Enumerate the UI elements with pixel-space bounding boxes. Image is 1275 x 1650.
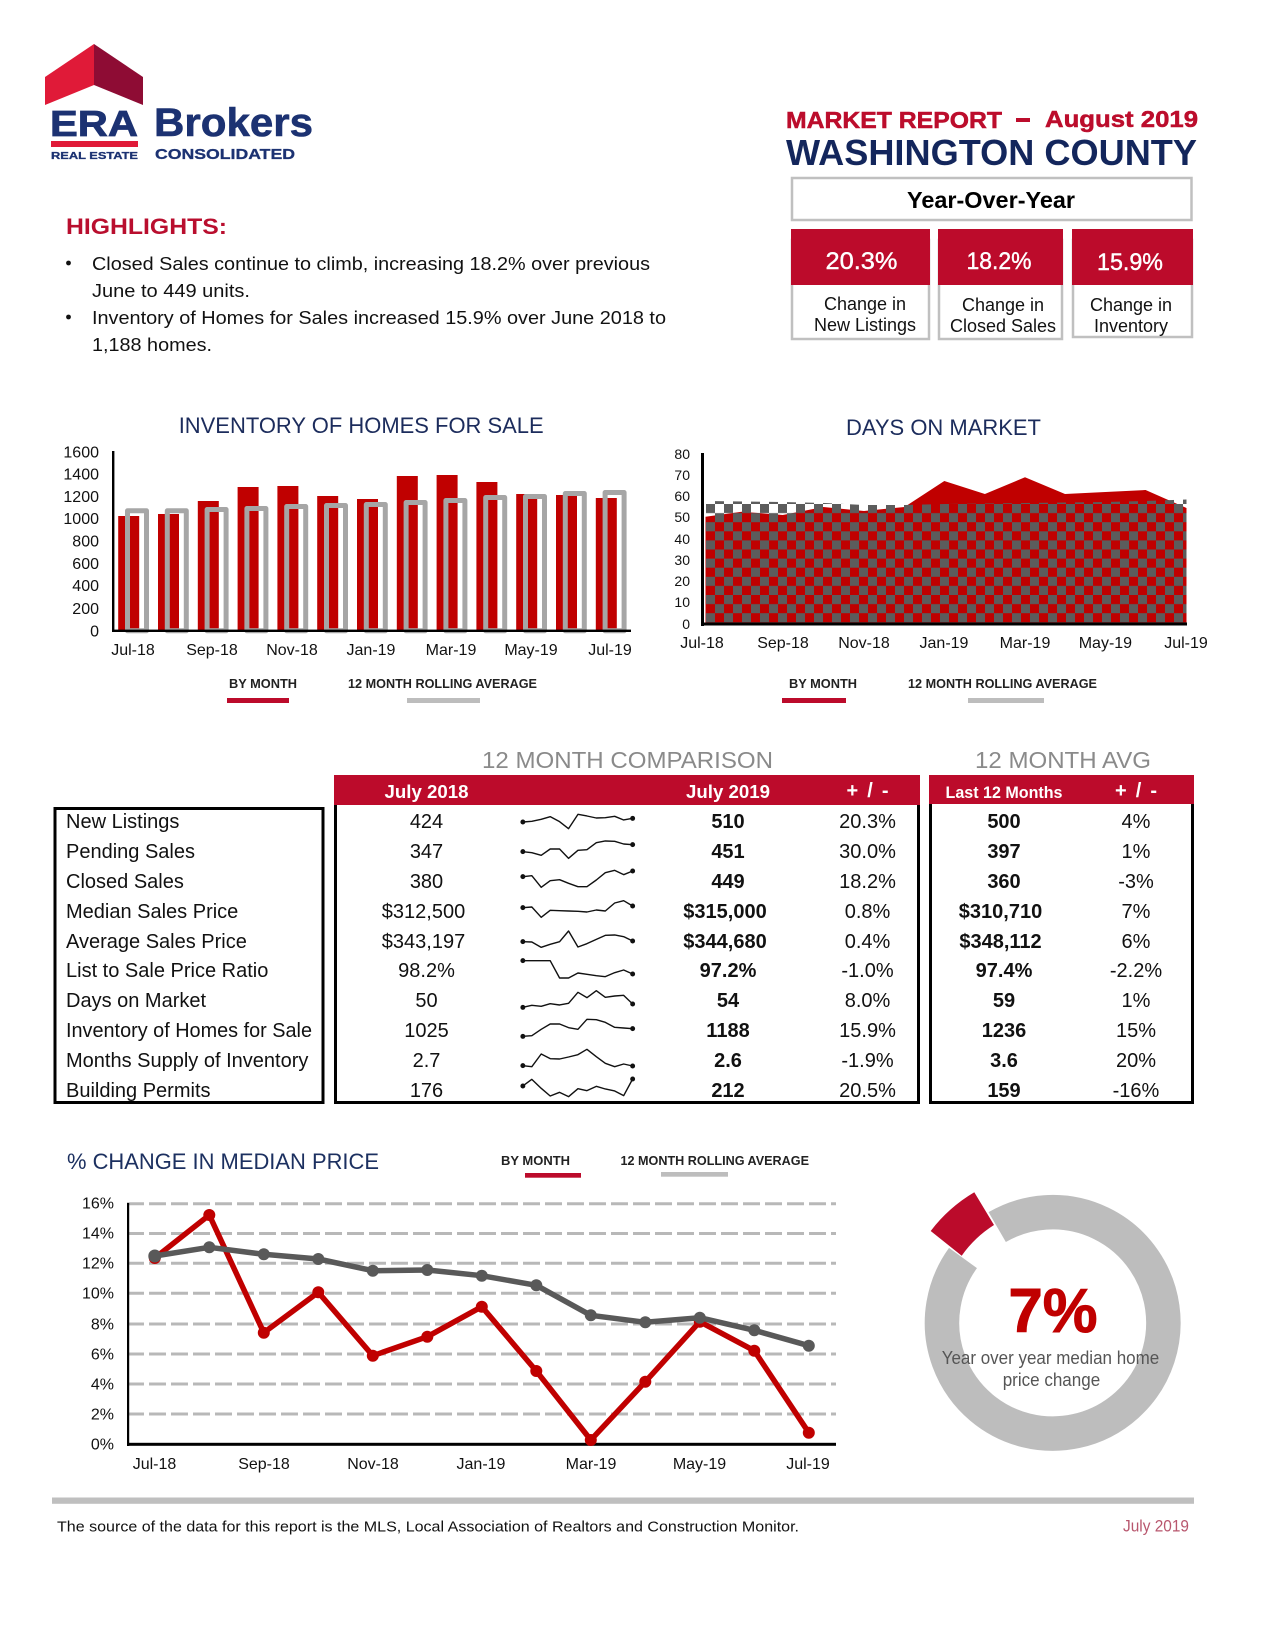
- table frame: row labels: [55, 808, 323, 1102]
- bullet text 1: June to 449 units.: [92, 280, 250, 301]
- y axis labels: [63, 444, 99, 640]
- column: average change: 7%: [1122, 901, 1151, 923]
- column: average change: [1110, 811, 1162, 1102]
- logo: consolidated: CONSOLIDATED: [155, 146, 295, 163]
- card: inventory: Change in: [1090, 295, 1172, 315]
- legend: [782, 677, 1097, 703]
- column: July 2018: 176: [410, 1080, 443, 1102]
- table header: average: Last 12 Months: [946, 784, 1062, 802]
- y axis labels: 0%: [91, 1436, 114, 1454]
- donut track: [942, 1212, 1163, 1434]
- y axis labels: 200: [72, 601, 99, 618]
- column: July 2019: 451: [711, 841, 745, 863]
- line chart: [82, 1196, 836, 1473]
- card: closed sales: [938, 229, 1063, 339]
- card: closed sales: Closed Sales: [950, 316, 1056, 336]
- chart title: INVENTORY OF HOMES FOR SALE: [179, 413, 544, 438]
- column: July 2018: 380: [410, 871, 443, 893]
- column: average change: 6%: [1122, 931, 1151, 953]
- panel: comparison tables: [55, 747, 1194, 1102]
- column: July 2018: 424: [410, 811, 443, 833]
- column: average change: -2.2%: [1110, 960, 1162, 982]
- legend: 12 MONTH ROLLING AVERAGE: [348, 677, 537, 691]
- y axis labels: [674, 446, 690, 632]
- bar chart: [63, 444, 632, 659]
- card: closed sales: 18.2%: [966, 248, 1032, 275]
- x axis labels: Jan-19: [457, 1456, 506, 1473]
- y axis labels: 4%: [91, 1376, 114, 1394]
- x axis labels: Jul-19: [588, 642, 632, 659]
- rolling average checker area: [706, 500, 1186, 624]
- bullet text 1: Closed Sales continue to climb, increasing 18.2% over previous: [92, 253, 650, 274]
- heading dash: [1016, 118, 1030, 122]
- column: change: -1.9%: [841, 1050, 894, 1072]
- column: last 12 months: 397: [987, 841, 1021, 863]
- y axis labels: 400: [72, 578, 99, 595]
- column: last 12 months: $310,710: [959, 901, 1042, 923]
- x axis labels: Mar-19: [566, 1456, 616, 1473]
- column: average change: 1%: [1122, 990, 1151, 1012]
- y axis labels: 800: [72, 534, 99, 550]
- x axis labels: Jan-19: [347, 642, 396, 659]
- panel: year-over-year: [791, 178, 1193, 339]
- x axis labels: Jul-19: [786, 1456, 830, 1473]
- column: average change: 4%: [1122, 811, 1151, 833]
- x axis labels: Mar-19: [426, 642, 476, 659]
- y axis labels: 1400: [63, 466, 99, 484]
- legend: BY MONTH: [501, 1154, 570, 1168]
- column: last 12 months: 360: [987, 871, 1021, 893]
- line: rolling average: [148, 1241, 815, 1352]
- legend: 12 MONTH ROLLING AVERAGE: [908, 677, 1097, 691]
- table header: average: + / -: [1115, 780, 1157, 802]
- x axis labels: Jul-18: [111, 642, 155, 659]
- x axis labels: Jul-18: [680, 635, 724, 652]
- column: July 2018: 347: [410, 841, 443, 863]
- highlights panel: [66, 214, 666, 355]
- column: change: 8.0%: [845, 990, 891, 1012]
- column: last 12 months: 97.4%: [976, 960, 1033, 982]
- donut gauge: year over year median price change: [931, 1192, 1163, 1434]
- column: July 2019: 97.2%: [700, 960, 757, 982]
- column: change: 18.2%: [839, 871, 896, 893]
- row labels: New Listings: [66, 811, 179, 833]
- column: average change: -16%: [1113, 1080, 1160, 1102]
- rolling average outline bars: [128, 492, 624, 631]
- y axis labels: 0: [682, 616, 690, 632]
- y axis labels: 2%: [91, 1406, 114, 1424]
- table frame: average: [930, 790, 1192, 1102]
- row labels: Months Supply of Inventory: [66, 1050, 308, 1072]
- y axis labels: 50: [674, 509, 690, 525]
- row labels: Closed Sales: [66, 871, 184, 893]
- card: inventory: Inventory: [1094, 316, 1168, 336]
- column: change: 15.9%: [839, 1020, 896, 1042]
- logo wordmark: ERA: ERA: [50, 103, 138, 144]
- gauge caption: Year over year median home: [942, 1348, 1159, 1368]
- chart title: % CHANGE IN MEDIAN PRICE: [67, 1149, 379, 1174]
- y axis labels: 6%: [91, 1346, 114, 1364]
- row labels: Median Sales Price: [66, 901, 238, 923]
- bullet text 2: Inventory of Homes for Sales increased 15.9% over June 2018 to: [92, 307, 666, 328]
- x axis labels: Nov-18: [266, 642, 318, 659]
- card: new listings: Change in: [824, 294, 906, 314]
- source note: The source of the data for this report is the MLS, Local Association of Realtors and Construction Monitor.: [57, 1518, 799, 1536]
- x axis labels: Nov-18: [347, 1456, 399, 1473]
- chart title: DAYS ON MARKET: [846, 415, 1041, 440]
- gauge caption: price change: [1003, 1370, 1100, 1390]
- x axis labels: Sep-18: [186, 642, 238, 659]
- column: July 2018: 1025: [404, 1020, 449, 1042]
- card: inventory: 15.9%: [1097, 249, 1163, 276]
- column: change: -1.0%: [841, 960, 894, 982]
- panel: inventory of homes for sale: [63, 413, 632, 703]
- column: July 2018: [382, 811, 465, 1102]
- y axis labels: 1600: [63, 444, 99, 462]
- card: new listings: 20.3%: [826, 248, 898, 275]
- bullet text 2: [66, 307, 666, 355]
- table header: comparison: [334, 775, 920, 805]
- x axis labels: Jul-19: [1164, 635, 1208, 652]
- sparklines: [520, 814, 635, 1097]
- area chart: [674, 446, 1208, 652]
- x axis labels: [133, 1456, 830, 1473]
- column: July 2019: 212: [711, 1080, 745, 1102]
- column: July 2019: 1188: [706, 1020, 750, 1042]
- column: last 12 months: $348,112: [959, 931, 1042, 953]
- panel: days on market: [674, 415, 1208, 703]
- x axis labels: Mar-19: [1000, 635, 1050, 652]
- column: July 2018: $343,197: [382, 931, 465, 953]
- table header: average: [929, 775, 1194, 804]
- y axis labels: 10%: [82, 1286, 114, 1302]
- table frame: comparison: [336, 790, 918, 1102]
- heading: 12 month comparison: 12 MONTH COMPARISON: [482, 747, 773, 773]
- x axis labels: May-19: [504, 642, 558, 659]
- icon: house roof: [45, 44, 143, 105]
- column: July 2018: 50: [415, 990, 438, 1012]
- y axis labels: [82, 1196, 114, 1454]
- panel: percent change in median price: [67, 1149, 836, 1473]
- column: last 12 months: 159: [987, 1080, 1021, 1102]
- row labels: Pending Sales: [66, 841, 195, 863]
- footer date: July 2019: [1123, 1518, 1189, 1536]
- logo wordmark: Brokers: Brokers: [154, 101, 313, 145]
- x axis labels: [111, 642, 632, 659]
- x axis labels: Sep-18: [757, 635, 809, 652]
- report title block: [786, 106, 1198, 173]
- y axis labels: 60: [674, 488, 690, 504]
- card: new listings: [791, 229, 930, 339]
- heading: date: August 2019: [1045, 106, 1198, 132]
- x axis labels: Sep-18: [238, 1456, 290, 1473]
- logo red bar: [51, 141, 138, 147]
- row labels: Average Sales Price: [66, 931, 247, 953]
- card: closed sales: Change in: [962, 295, 1044, 315]
- y axis labels: 1000: [63, 511, 99, 528]
- column: last 12 months: 59: [993, 990, 1015, 1012]
- y axis labels: 10: [674, 594, 690, 610]
- column: change: [839, 811, 896, 1102]
- table header: comparison: July 2018: [384, 782, 468, 802]
- column: last 12 months: 1236: [982, 1020, 1026, 1042]
- legend: 12 MONTH ROLLING AVERAGE: [620, 1154, 809, 1168]
- column: change: 0.4%: [845, 931, 891, 953]
- legend: [501, 1154, 809, 1178]
- x axis labels: May-19: [673, 1456, 726, 1473]
- column: last 12 months: [959, 811, 1042, 1102]
- y axis labels: 40: [674, 531, 690, 547]
- y axis labels: 70: [674, 467, 690, 483]
- table header: comparison: + / -: [846, 780, 888, 802]
- monthly area: [706, 477, 1186, 624]
- y axis labels: 14%: [82, 1226, 114, 1242]
- year-over-year heading box: Year-Over-Year: [907, 187, 1075, 213]
- y axis labels: 8%: [91, 1316, 114, 1334]
- row labels: Days on Market: [66, 990, 206, 1012]
- row labels: Inventory of Homes for Sale: [66, 1020, 312, 1042]
- y axis labels: 30: [674, 552, 690, 568]
- legend: [227, 677, 537, 703]
- column: July 2019: 54: [717, 990, 740, 1012]
- column: July 2018: 98.2%: [398, 960, 455, 982]
- bullet text 1: [66, 253, 650, 301]
- footer: [52, 1498, 1194, 1536]
- line: by month: [149, 1209, 815, 1446]
- column: last 12 months: 3.6: [990, 1050, 1018, 1072]
- legend: BY MONTH: [789, 677, 857, 691]
- y axis labels: 0: [90, 624, 99, 640]
- row labels: [66, 811, 312, 1102]
- bullet text 2: 1,188 homes.: [92, 334, 212, 355]
- y axis labels: 16%: [82, 1196, 114, 1212]
- column: average change: 20%: [1116, 1050, 1156, 1072]
- donut highlight segment: [931, 1192, 994, 1256]
- y axis labels: 80: [674, 446, 690, 462]
- column: July 2019: $344,680: [683, 931, 767, 953]
- column: change: 20.5%: [839, 1080, 896, 1102]
- monthly bars: [118, 475, 617, 630]
- column: July 2018: $312,500: [382, 901, 465, 923]
- legend: BY MONTH: [229, 677, 297, 691]
- column: average change: 15%: [1116, 1020, 1156, 1042]
- column: last 12 months: 500: [987, 811, 1021, 833]
- x axis labels: Nov-18: [838, 635, 890, 652]
- column: July 2019: $315,000: [683, 901, 767, 923]
- big figure: 7%: [1008, 1277, 1098, 1346]
- y axis labels: 1200: [63, 489, 99, 506]
- heading: 12 month avg: 12 MONTH AVG: [975, 747, 1151, 773]
- x axis labels: Jul-18: [133, 1456, 176, 1473]
- row labels: List to Sale Price Ratio: [66, 960, 268, 982]
- y axis labels: 12%: [82, 1256, 114, 1272]
- column: July 2019: 510: [711, 811, 745, 833]
- column: average change: -3%: [1118, 871, 1154, 893]
- row labels: Building Permits: [66, 1080, 211, 1102]
- logo: ERA Brokers Consolidated: [45, 44, 313, 163]
- column: average change: 1%: [1122, 841, 1151, 863]
- card: new listings: New Listings: [814, 315, 916, 335]
- column: July 2019: [683, 811, 767, 1102]
- table header: comparison: July 2019: [686, 782, 770, 802]
- column: July 2019: 449: [711, 871, 745, 893]
- column: change: 30.0%: [839, 841, 896, 863]
- heading: county: WASHINGTON COUNTY: [786, 132, 1197, 173]
- column: July 2019: 2.6: [714, 1050, 742, 1072]
- gauge caption: [942, 1348, 1159, 1390]
- logo: real estate: REAL ESTATE: [51, 151, 138, 162]
- y axis labels: 600: [72, 556, 99, 573]
- card: inventory: [1072, 229, 1193, 337]
- x axis labels: [680, 635, 1208, 652]
- column: July 2018: 2.7: [413, 1050, 440, 1072]
- column: change: 0.8%: [845, 901, 891, 923]
- heading: market report: MARKET REPORT: [786, 107, 1002, 133]
- year-over-year heading box: [792, 178, 1192, 220]
- column: change: 20.3%: [839, 811, 896, 833]
- x axis labels: May-19: [1079, 635, 1132, 652]
- y axis labels: 20: [674, 573, 690, 589]
- heading: highlights: HIGHLIGHTS:: [66, 214, 227, 239]
- x axis labels: Jan-19: [920, 635, 969, 652]
